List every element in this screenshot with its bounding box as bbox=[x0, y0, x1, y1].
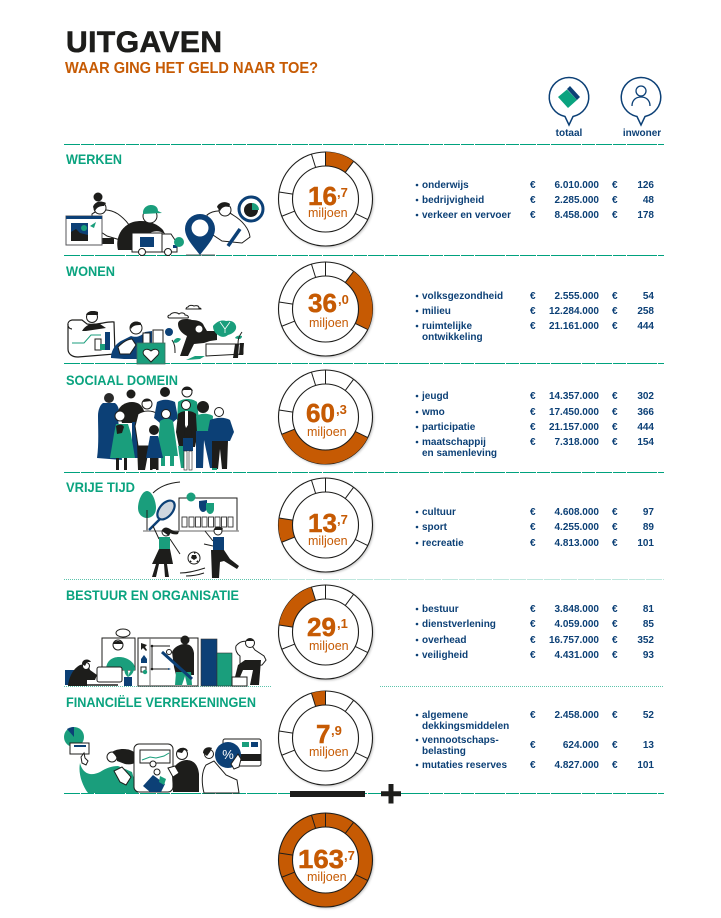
subtitle: WAAR GING HET GELD NAAR TOE? bbox=[65, 60, 318, 77]
value: 36,0 miljoen: 36 bbox=[308, 288, 337, 318]
value: 163,7 miljoen: miljoen bbox=[307, 870, 347, 884]
value: 60,3 miljoen bbox=[306, 398, 347, 439]
table: vrije tijd: € bbox=[530, 538, 536, 549]
value: 29,1 miljoen bbox=[307, 612, 349, 653]
table: vrije tijd: 4.608.000 bbox=[554, 507, 599, 518]
table: wonen: 444 bbox=[637, 321, 654, 332]
value: 29,1 miljoen: ,1 bbox=[337, 616, 348, 631]
illustration: financiele verrekeningen: % bbox=[222, 747, 234, 762]
table: bestuur en organisatie: € bbox=[530, 650, 536, 661]
table: financiele verrekeningen: 4.827.000 bbox=[554, 760, 599, 771]
table: sociaal domein: 17.450.000 bbox=[549, 407, 599, 418]
table: werken: € bbox=[612, 180, 618, 191]
value: 36,0 miljoen bbox=[308, 288, 349, 330]
icon: inwoner pin bbox=[621, 77, 661, 139]
table: wonen: 258 bbox=[637, 306, 654, 317]
table: financiele verrekeningen: € bbox=[530, 740, 536, 751]
table: financiele verrekeningen: € bbox=[612, 760, 618, 771]
table: werken: € bbox=[530, 210, 536, 221]
table: werken: 6.010.000 bbox=[554, 180, 599, 191]
table: sociaal domein: € bbox=[612, 437, 618, 448]
table: bestuur en organisatie bbox=[416, 604, 654, 661]
table: bestuur en organisatie: € bbox=[612, 619, 618, 630]
table: vrije tijd: 97 bbox=[643, 507, 654, 518]
donut: vrije tijd bbox=[278, 478, 372, 572]
table: wonen: € bbox=[530, 306, 536, 317]
table: bestuur en organisatie: 93 bbox=[643, 650, 654, 661]
table: werken: 126 bbox=[637, 180, 654, 191]
table: financiele verrekeningen: € bbox=[530, 710, 536, 721]
panel: bestuur en organisatie bbox=[65, 585, 654, 686]
label: totaal: totaal bbox=[556, 128, 583, 139]
table: wonen: € bbox=[612, 306, 618, 317]
table: vrije tijd: € bbox=[530, 522, 536, 533]
table: vrije tijd: recreatie bbox=[422, 538, 464, 549]
table: werken: 178 bbox=[637, 210, 654, 221]
table: werken: € bbox=[612, 195, 618, 206]
table: vrije tijd: € bbox=[612, 538, 618, 549]
table: bestuur en organisatie: 81 bbox=[643, 604, 654, 615]
illustration: vrije tijd bbox=[138, 482, 239, 578]
table: wonen: volksgezondheid bbox=[422, 291, 503, 302]
table: bestuur en organisatie: € bbox=[612, 604, 618, 615]
value: 60,3 miljoen: ,3 bbox=[336, 402, 347, 417]
value: 29,1 miljoen: miljoen bbox=[309, 639, 349, 653]
table: financiele verrekeningen: € bbox=[530, 760, 536, 771]
table: financiele verrekeningen: 624.000 bbox=[563, 740, 599, 751]
illustration: group of people bbox=[97, 387, 234, 470]
table: wonen bbox=[416, 291, 654, 343]
table: sociaal domein: € bbox=[612, 407, 618, 418]
table: wonen: € bbox=[612, 291, 618, 302]
icon: totaal pin bbox=[549, 77, 589, 139]
table: financiele verrekeningen: 2.458.000 bbox=[554, 710, 599, 721]
table: financiele verrekeningen: 13 bbox=[643, 740, 654, 751]
illustration: wonen bbox=[68, 305, 244, 364]
table: werken: € bbox=[612, 210, 618, 221]
table: wonen: € bbox=[530, 321, 536, 332]
value: 36,0 miljoen: ,0 bbox=[338, 292, 349, 307]
value: 7,9 miljoen: ,9 bbox=[331, 723, 342, 738]
panel: wonen bbox=[66, 262, 654, 364]
table: bestuur en organisatie: 85 bbox=[643, 619, 654, 630]
table: bestuur en organisatie: € bbox=[530, 619, 536, 630]
table: sociaal domein: 154 bbox=[637, 437, 654, 448]
table: vrije tijd: 89 bbox=[643, 522, 654, 533]
table: sociaal domein: 444 bbox=[637, 422, 654, 433]
heading: wonen: WONEN bbox=[66, 263, 115, 279]
table: wonen: 54 bbox=[643, 291, 654, 302]
table: vrije tijd bbox=[416, 507, 654, 549]
table: bestuur en organisatie: € bbox=[530, 635, 536, 646]
table: bestuur en organisatie: 352 bbox=[637, 635, 654, 646]
table: vrije tijd: 4.813.000 bbox=[554, 538, 599, 549]
value: 163,7 miljoen bbox=[298, 844, 355, 884]
value: 13,7 miljoen: miljoen bbox=[308, 534, 348, 548]
value: 7,9 miljoen bbox=[309, 719, 349, 759]
table: financiele verrekeningen: vennootschaps- bbox=[422, 735, 499, 746]
table: financiele verrekeningen: algemene bbox=[422, 710, 469, 721]
table: wonen: 2.555.000 bbox=[554, 291, 599, 302]
table: vrije tijd: 101 bbox=[637, 538, 654, 549]
heading: bestuur en organisatie: BESTUUR EN ORGANISATIE bbox=[66, 587, 239, 603]
table: sociaal domein: € bbox=[612, 422, 618, 433]
illustration: bestuur en organisatie bbox=[65, 629, 266, 686]
table: wonen: € bbox=[612, 321, 618, 332]
minus symbol bbox=[290, 791, 365, 797]
value: 16,7 miljoen: miljoen bbox=[308, 206, 348, 220]
table: werken: bedrijvigheid bbox=[422, 195, 484, 206]
heading: financiele verrekeningen: FINANCIËLE VERREKENINGEN bbox=[66, 694, 256, 710]
panel: sociaal domein bbox=[66, 370, 654, 470]
table: financiele verrekeningen: € bbox=[612, 740, 618, 751]
table: bestuur en organisatie: € bbox=[530, 604, 536, 615]
table: bestuur en organisatie: overhead bbox=[422, 635, 466, 646]
value: 13,7 miljoen: 13 bbox=[308, 508, 337, 538]
donut: werken bbox=[278, 152, 372, 246]
table: financiele verrekeningen: € bbox=[612, 710, 618, 721]
table: sociaal domein: maatschappij bbox=[422, 437, 486, 448]
table: vrije tijd: € bbox=[530, 507, 536, 518]
table: bestuur en organisatie: € bbox=[612, 635, 618, 646]
table: werken: € bbox=[530, 195, 536, 206]
plus symbol bbox=[381, 784, 401, 804]
table: vrije tijd: 4.255.000 bbox=[554, 522, 599, 533]
table: sociaal domein: 7.318.000 bbox=[554, 437, 599, 448]
table: financiele verrekeningen: 101 bbox=[637, 760, 654, 771]
table: wonen: ruimtelijke bbox=[422, 321, 472, 332]
table: wonen: 21.161.000 bbox=[549, 321, 599, 332]
table: sociaal domein: en samenleving bbox=[422, 448, 497, 459]
value: 60,3 miljoen: 60 bbox=[306, 398, 335, 428]
table: vrije tijd: € bbox=[612, 507, 618, 518]
table: sociaal domein: 21.157.000 bbox=[549, 422, 599, 433]
table: sociaal domein: 302 bbox=[637, 391, 654, 402]
table: werken: verkeer en vervoer bbox=[422, 210, 511, 221]
table: werken bbox=[416, 180, 654, 221]
heading: werken: WERKEN bbox=[66, 151, 122, 167]
table: werken: 2.285.000 bbox=[554, 195, 599, 206]
panel: vrije tijd bbox=[66, 478, 654, 578]
table: sociaal domein: 14.357.000 bbox=[549, 391, 599, 402]
total donut bbox=[278, 813, 372, 907]
table: sociaal domein: 366 bbox=[637, 407, 654, 418]
table: sociaal domein bbox=[416, 391, 654, 459]
table: bestuur en organisatie: dienstverlening bbox=[422, 619, 496, 630]
value: 163,7 miljoen: ,7 bbox=[344, 848, 355, 863]
table: sociaal domein: € bbox=[530, 437, 536, 448]
table: werken: 8.458.000 bbox=[554, 210, 599, 221]
table: werken: € bbox=[530, 180, 536, 191]
table: bestuur en organisatie: 4.431.000 bbox=[554, 650, 599, 661]
value: 16,7 miljoen: ,7 bbox=[337, 185, 348, 200]
table: sociaal domein: € bbox=[530, 391, 536, 402]
donut: financiele verrekeningen bbox=[278, 691, 372, 785]
table: sociaal domein: jeugd bbox=[421, 391, 449, 402]
table: sociaal domein: € bbox=[530, 422, 536, 433]
table: vrije tijd: sport bbox=[422, 522, 448, 533]
table: financiele verrekeningen bbox=[416, 710, 654, 771]
table: sociaal domein: € bbox=[612, 391, 618, 402]
table: financiele verrekeningen: dekkingsmiddelen bbox=[422, 721, 509, 732]
panel: werken bbox=[66, 151, 654, 256]
value: 60,3 miljoen: miljoen bbox=[307, 425, 347, 439]
donut: sociaal domein bbox=[278, 370, 372, 464]
value: 7,9 miljoen: miljoen bbox=[309, 745, 349, 759]
table: bestuur en organisatie: 4.059.000 bbox=[554, 619, 599, 630]
table: bestuur en organisatie: bestuur bbox=[422, 604, 459, 615]
table: vrije tijd: cultuur bbox=[422, 507, 456, 518]
donut: bestuur en organisatie bbox=[278, 585, 372, 679]
table: sociaal domein: € bbox=[530, 407, 536, 418]
illustration: werken bbox=[66, 192, 263, 256]
table: financiele verrekeningen: mutaties reserves bbox=[422, 760, 507, 771]
value: 13,7 miljoen bbox=[308, 508, 348, 548]
table: bestuur en organisatie: € bbox=[612, 650, 618, 661]
donut: wonen bbox=[278, 262, 372, 356]
heading: vrije tijd: VRIJE TIJD bbox=[66, 479, 135, 495]
table: sociaal domein: wmo bbox=[421, 407, 445, 418]
panel: financiele verrekeningen bbox=[64, 691, 654, 793]
table: financiele verrekeningen: belasting bbox=[422, 746, 466, 757]
value: 29,1 miljoen: 29 bbox=[307, 612, 336, 642]
value: 163,7 miljoen: 163 bbox=[298, 844, 344, 874]
label: inwoner: inwoner bbox=[623, 128, 661, 139]
value: 13,7 miljoen: ,7 bbox=[337, 512, 348, 527]
title: UITGAVEN bbox=[66, 26, 222, 59]
value: 36,0 miljoen: miljoen bbox=[309, 316, 349, 330]
value: 16,7 miljoen bbox=[308, 181, 348, 220]
table: wonen: € bbox=[530, 291, 536, 302]
table: wonen: 12.284.000 bbox=[549, 306, 599, 317]
table: werken: 48 bbox=[643, 195, 654, 206]
table: bestuur en organisatie: 16.757.000 bbox=[549, 635, 599, 646]
value: 7,9 miljoen: 7 bbox=[316, 719, 330, 749]
table: bestuur en organisatie: 3.848.000 bbox=[554, 604, 599, 615]
table: wonen: ontwikkeling bbox=[422, 332, 483, 343]
table: wonen: milieu bbox=[422, 306, 451, 317]
table: financiele verrekeningen: 52 bbox=[643, 710, 654, 721]
illustration: financiele verrekeningen bbox=[64, 727, 261, 793]
heading: sociaal domein: SOCIAAL DOMEIN bbox=[66, 372, 178, 388]
table: vrije tijd: € bbox=[612, 522, 618, 533]
table: sociaal domein: participatie bbox=[422, 422, 476, 433]
value: 16,7 miljoen: 16 bbox=[308, 181, 337, 211]
table: bestuur en organisatie: veiligheid bbox=[422, 650, 468, 661]
table: werken: onderwijs bbox=[422, 180, 469, 191]
